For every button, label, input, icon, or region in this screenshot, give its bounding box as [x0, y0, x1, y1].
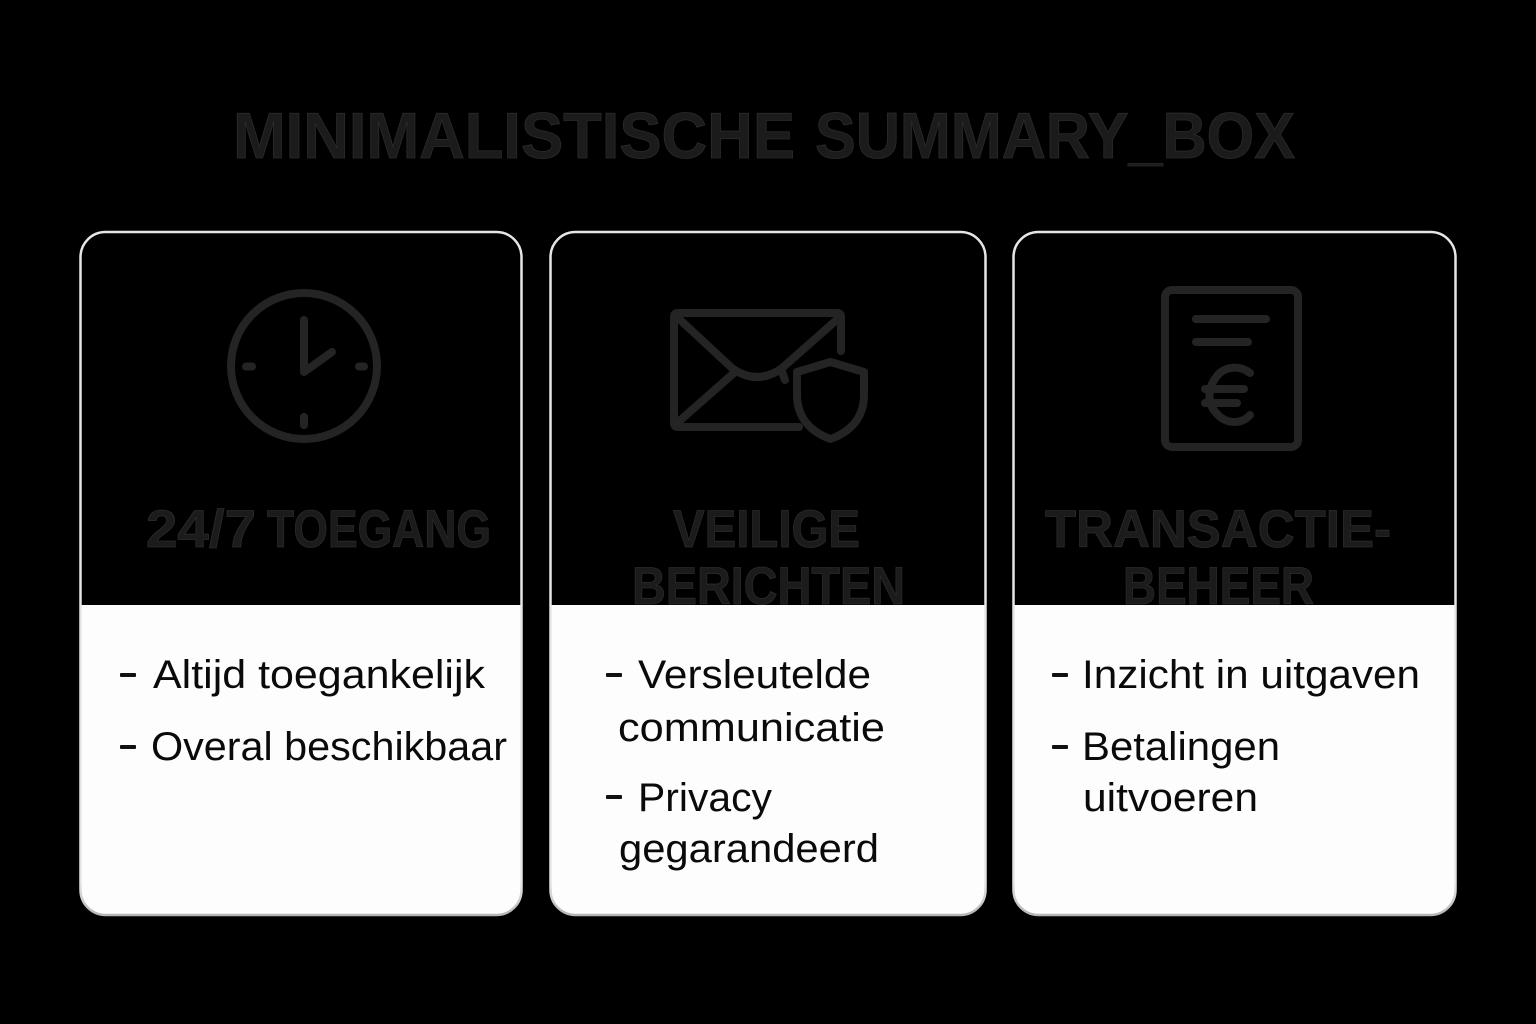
list item: overal beschikbaar: Overal beschikbaar	[151, 725, 507, 769]
panel: veilige berichten	[550, 232, 986, 915]
white content area	[550, 605, 986, 915]
heading: transactie-beheer: TRANSACTIE-	[1045, 500, 1391, 559]
list item: privacy gegarandeerd: Privacy	[638, 776, 772, 820]
list item: versleutelde communicatie: communicatie	[618, 706, 885, 750]
list item: privacy gegarandeerd: gegarandeerd	[619, 827, 879, 871]
heading: veilige berichten: VEILIGE	[673, 500, 860, 559]
heading: 24/7 toegang	[146, 500, 491, 559]
title	[233, 99, 1295, 172]
white content area	[1014, 605, 1456, 915]
list item: privacy gegarandeerd	[606, 776, 879, 871]
panel: 24/7 toegang	[80, 232, 522, 915]
heading: veilige berichten	[632, 500, 905, 616]
icon: envelope with shield	[674, 313, 864, 439]
heading: 24/7 toegang: TOEGANG	[267, 500, 491, 559]
list item: inzicht in uitgaven: Inzicht in uitgaven	[1082, 653, 1420, 697]
heading: transactie-beheer: BEHEER	[1123, 557, 1314, 616]
icon: document with euro	[1165, 290, 1298, 447]
card background	[1014, 232, 1456, 915]
title: MINIMALISTISCHE	[233, 99, 795, 172]
title: SUMMARY_BOX	[815, 99, 1295, 172]
heading: transactie-beheer	[1045, 500, 1391, 616]
list item: betalingen uitvoeren: uitvoeren	[1083, 776, 1258, 820]
card background	[80, 232, 522, 915]
icon: clock	[231, 293, 377, 439]
list item: betalingen uitvoeren	[1052, 725, 1280, 820]
white content area	[80, 605, 522, 915]
panel: transactie-beheer	[1014, 232, 1456, 915]
list item: versleutelde communicatie	[606, 653, 885, 750]
card outline	[550, 232, 986, 915]
list item: betalingen uitvoeren: Betalingen	[1082, 725, 1280, 769]
list item: versleutelde communicatie: Versleutelde	[638, 653, 871, 697]
card outline	[1014, 232, 1456, 915]
card background	[550, 232, 986, 915]
list item: altijd toegankelijk: Altijd toegankelijk	[153, 653, 486, 697]
card outline	[80, 232, 522, 915]
heading: veilige berichten: BERICHTEN	[632, 557, 905, 616]
heading: 24/7 toegang: 24/7	[146, 500, 256, 559]
